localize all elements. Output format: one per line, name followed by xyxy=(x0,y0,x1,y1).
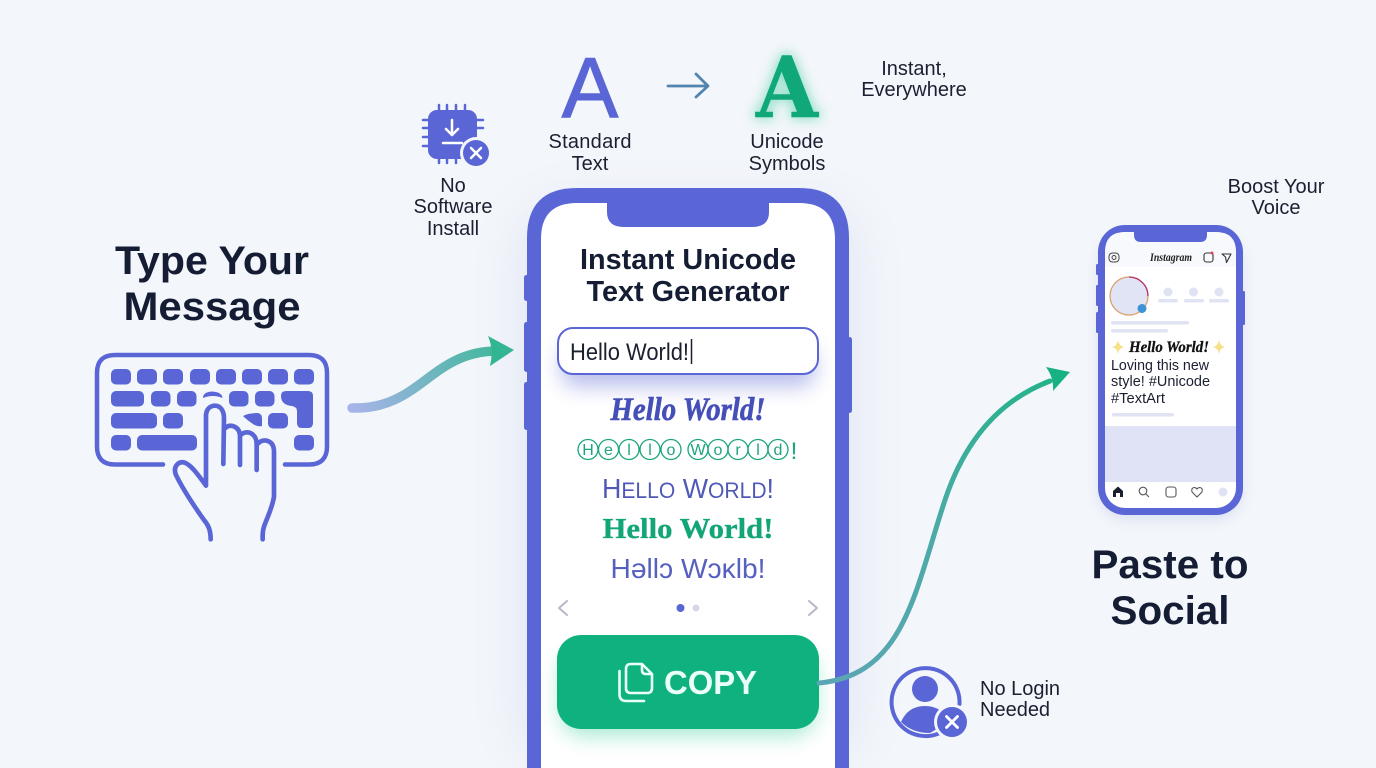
post image placeholder xyxy=(1105,426,1236,482)
carousel controls xyxy=(559,601,817,615)
copy button: COPY xyxy=(664,664,757,701)
phone title xyxy=(580,244,796,308)
font sample: circled: W xyxy=(690,442,706,459)
label: standard text: Text xyxy=(572,153,609,175)
font sample: circled: l xyxy=(648,442,652,459)
icon: keyboard with typing hand xyxy=(97,355,327,539)
label: no software install: Software xyxy=(414,196,492,218)
profile stats xyxy=(1111,288,1229,332)
font sample: circled: ! xyxy=(791,438,797,465)
instagram header xyxy=(1105,228,1236,267)
icon: no login needed xyxy=(892,668,970,740)
label: unicode symbols: Unicode xyxy=(750,131,824,153)
label: unicode symbols xyxy=(749,131,825,175)
label: no software install xyxy=(414,175,492,240)
label: instant everywhere: Instant, xyxy=(881,58,947,80)
icon: unicode letter A: A xyxy=(755,38,820,137)
profile avatar xyxy=(1110,277,1148,315)
heading: paste to social xyxy=(1092,543,1248,633)
label: boost your voice xyxy=(1228,176,1325,219)
post text: Loving this new xyxy=(1111,358,1210,374)
instagram header: Instagram xyxy=(1149,250,1192,264)
arrow: copy to social xyxy=(819,367,1070,683)
heading: type your message xyxy=(115,239,309,329)
label: instant everywhere xyxy=(861,58,967,101)
heading: paste to social: Social xyxy=(1110,589,1230,633)
panel: social phone xyxy=(1096,225,1245,520)
arrow: keyboard to input xyxy=(352,336,514,408)
post text: style! #Unicode xyxy=(1111,374,1210,390)
label: unicode symbols: Symbols xyxy=(749,153,825,175)
label: no software install: No xyxy=(440,175,466,197)
font sample: circled: H xyxy=(582,442,594,459)
label: boost your voice: Boost Your xyxy=(1228,176,1325,198)
label: no login needed xyxy=(980,678,1060,721)
label: no login needed: Needed xyxy=(980,699,1050,721)
bottom navigation xyxy=(1113,486,1228,497)
phone title: Instant Unicode xyxy=(580,244,796,276)
text input xyxy=(558,328,818,387)
phone notch xyxy=(607,200,769,227)
font sample: phonetic: Həllɔ Wɔĸlb! xyxy=(610,553,766,584)
label: boost your voice: Voice xyxy=(1252,197,1300,219)
post text: #TextArt xyxy=(1111,391,1165,407)
post text: Hello World! xyxy=(1128,339,1209,356)
panel: main phone xyxy=(515,188,861,768)
font sample: circled: l xyxy=(627,442,631,459)
label: instant everywhere: Everywhere xyxy=(861,79,967,101)
label: standard text xyxy=(548,131,632,175)
icon: no software install chip xyxy=(423,105,492,169)
heading: type your message: Type Your xyxy=(115,239,309,283)
text input: Hello World! xyxy=(570,339,689,366)
heading: type your message: Message xyxy=(124,285,300,329)
font sample: script: Hello World! xyxy=(610,392,766,428)
phone title: Text Generator xyxy=(586,276,790,308)
font sample: circled: l xyxy=(756,442,760,459)
icon: standard letter A: A xyxy=(562,41,619,136)
font sample: circled: r xyxy=(735,442,741,459)
font sample: circled: o xyxy=(714,442,723,459)
copy button xyxy=(557,635,819,736)
icon: unicode letter A: A xyxy=(755,38,820,137)
label: no login needed: No Login xyxy=(980,678,1060,700)
heading: paste to social: Paste to xyxy=(1092,543,1248,587)
font sample: circled: d xyxy=(774,442,782,459)
arrow: standard to unicode xyxy=(668,74,708,97)
font sample: small caps: HELLO WORLD! xyxy=(602,473,774,504)
label: standard text: Standard xyxy=(548,131,632,153)
label: no software install: Install xyxy=(427,218,479,240)
font sample: circled xyxy=(578,438,797,465)
font sample: serif bold: Hello World! xyxy=(602,513,774,545)
font sample: circled: o xyxy=(667,442,676,459)
font sample: circled: e xyxy=(604,442,613,459)
post text xyxy=(1111,339,1225,407)
